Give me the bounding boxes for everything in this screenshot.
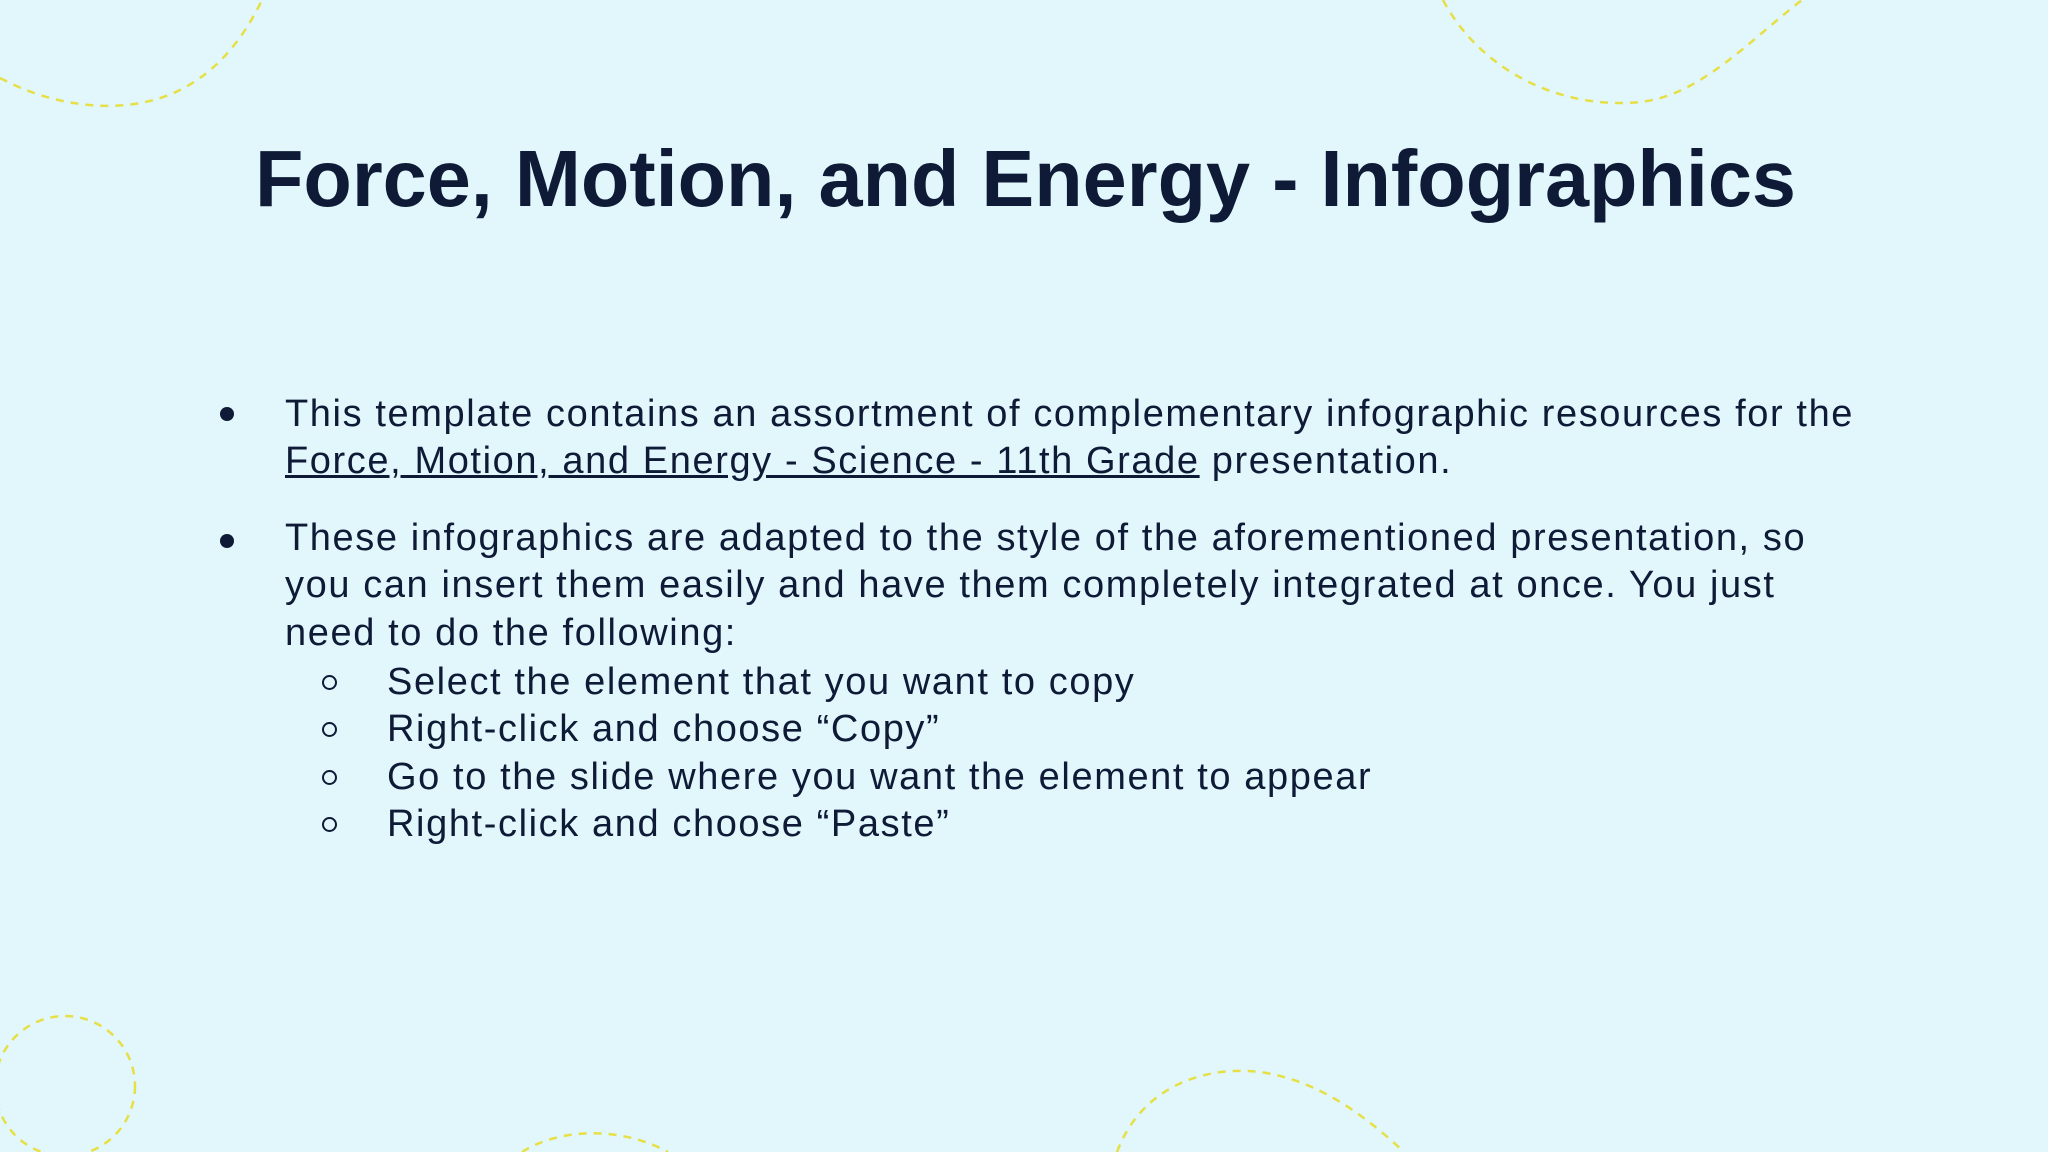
bullet 2 <box>220 517 1806 845</box>
bullet list <box>220 393 1854 845</box>
bullet 2: you can insert them easily and have them completely integrated at once. You just <box>285 564 1776 606</box>
sub-steps <box>322 661 1372 845</box>
sub-steps: Right-click and choose “Copy” <box>387 708 940 750</box>
bullet 1: This template contains an assortment of complementary infographic resources for the <box>285 393 1854 435</box>
bullet 1: Force, Motion, and Energy - Science - 11th Grade presentation. <box>285 440 1452 482</box>
bullet 2: These infographics are adapted to the style of the aforementioned presentation, so <box>285 517 1806 559</box>
sub-steps: Right-click and choose “Paste” <box>387 803 950 845</box>
sub-steps: Go to the slide where you want the element to appear <box>387 756 1372 798</box>
title: Force, Motion, and Energy - Infographics <box>255 134 1796 223</box>
bullet 2: need to do the following: <box>285 612 737 654</box>
sub-steps: Select the element that you want to copy <box>387 661 1135 703</box>
bullet 1 <box>220 393 1854 482</box>
